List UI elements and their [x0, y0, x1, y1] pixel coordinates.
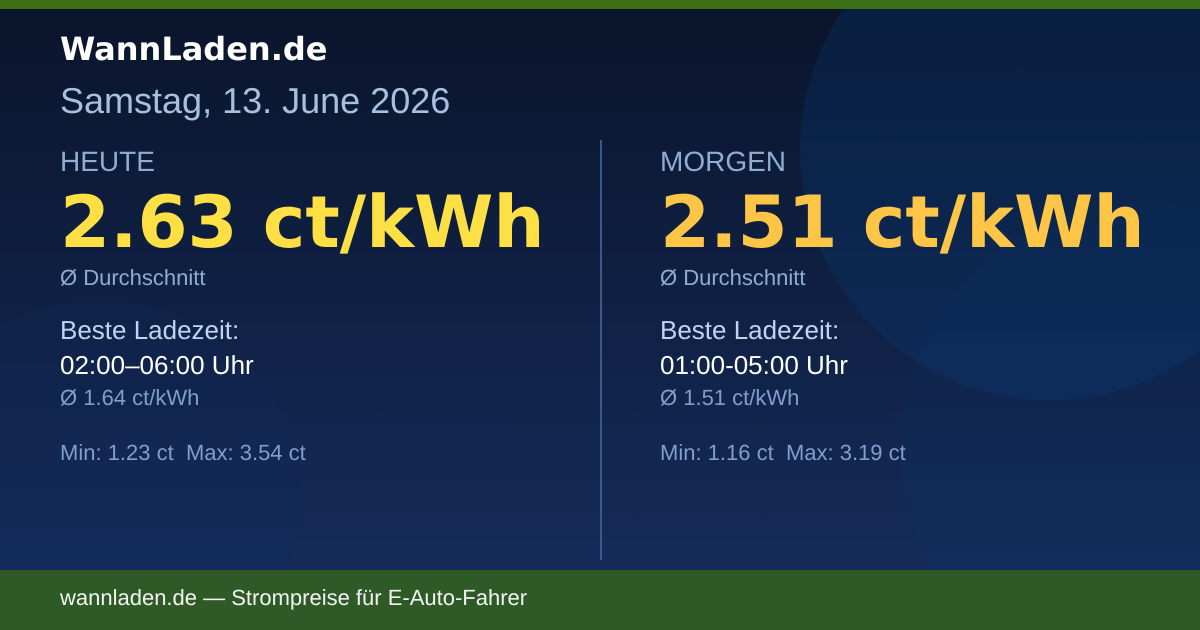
today average price: 2.63 ct/kWh — [60, 180, 545, 264]
panel: tomorrow — [660, 146, 1145, 465]
background circle: lower left — [0, 300, 300, 630]
today label: HEUTE — [60, 146, 155, 177]
today best window average: Ø 1.64 ct/kWh — [60, 385, 199, 410]
today best charging window: 02:00–06:00 Uhr — [60, 350, 254, 380]
tomorrow best charging heading: Beste Ladezeit: — [660, 315, 839, 345]
today best charging heading: Beste Ladezeit: — [60, 315, 239, 345]
top accent bar — [0, 0, 1200, 9]
panel: today — [60, 146, 545, 465]
today min and max: Min: 1.23 ct Max: 3.54 ct — [60, 440, 306, 465]
tomorrow best charging window: 01:00-05:00 Uhr — [660, 350, 848, 380]
background circle: lower right — [900, 200, 1200, 630]
tomorrow average caption: Ø Durchschnitt — [660, 265, 806, 290]
tomorrow average price: 2.51 ct/kWh — [660, 180, 1145, 264]
tomorrow min and max: Min: 1.16 ct Max: 3.19 ct — [660, 440, 906, 465]
date line: Samstag, 13. June 2026 — [60, 80, 450, 121]
today average caption: Ø Durchschnitt — [60, 265, 206, 290]
column divider — [600, 140, 602, 560]
tomorrow best window average: Ø 1.51 ct/kWh — [660, 385, 799, 410]
tomorrow label: MORGEN — [660, 146, 786, 177]
footer bar — [0, 570, 1200, 630]
background circle: large upper right — [800, 0, 1200, 400]
brand title: WannLaden.de — [60, 30, 327, 68]
footer text: wannladen.de — Strompreise für E-Auto-Fahrer — [59, 585, 527, 610]
